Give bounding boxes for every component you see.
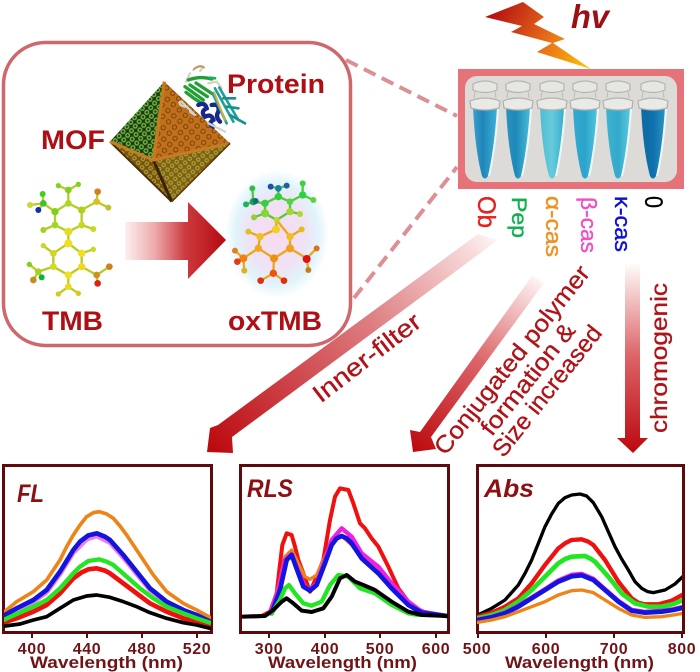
- Abs tick labels: [463, 641, 696, 658]
- Abs title: Abs: [483, 475, 534, 503]
- Abs tick labels: 500: [463, 641, 491, 658]
- Abs axis ticks: [478, 633, 682, 638]
- vial: beta-cas: [570, 81, 600, 178]
- label: formation &: formation &: [475, 318, 581, 441]
- Abs curves: [478, 494, 683, 622]
- vial label: kappa-cas: κ-cas: [610, 196, 635, 252]
- Abs tick labels: 600: [532, 641, 560, 658]
- icon: protein ribbon: [180, 66, 245, 132]
- dashed connector: lower: [354, 167, 457, 298]
- vial: alpha-cas: [537, 81, 567, 178]
- label: Size increased: Size increased: [487, 320, 608, 462]
- vial label: beta-cas: β-cas: [576, 197, 601, 253]
- FL curves: [3, 512, 210, 628]
- vial: kappa-cas: [603, 81, 633, 178]
- RLS tick labels: 300: [255, 641, 283, 658]
- FL tick labels: 400: [18, 641, 46, 658]
- FL tick labels: [18, 641, 211, 658]
- vial label: Pep: Pep: [507, 197, 530, 238]
- RLS curves: [243, 488, 447, 617]
- vial: Pep: [503, 81, 533, 178]
- Abs tick labels: 800: [668, 641, 696, 658]
- label: Protein: Protein: [227, 69, 325, 99]
- molecule: TMB: [27, 182, 113, 297]
- arrow: conjugated polymer: [410, 276, 544, 452]
- FL tick labels: 480: [128, 641, 156, 658]
- Abs tick labels: 700: [600, 641, 628, 658]
- label: chromogenic: chromogenic: [646, 283, 672, 433]
- panel: vial photo: [458, 69, 684, 189]
- FL tick labels: 520: [183, 641, 211, 658]
- vial: control 0: [638, 81, 668, 178]
- RLS x-axis title: Wavelength (nm): [268, 653, 417, 672]
- panel: MOF catalysis: [4, 42, 350, 346]
- chart: Abs: [463, 466, 696, 672]
- label: Inner-filter: Inner-filter: [307, 308, 427, 408]
- FL tick labels: 440: [73, 641, 101, 658]
- FL x-axis title: Wavelength (nm): [30, 653, 183, 672]
- RLS tick labels: 400: [311, 641, 339, 658]
- arrow: chromogenic: [617, 264, 648, 453]
- label: TMB: TMB: [42, 306, 103, 336]
- Abs x-axis title: Wavelength (nm): [505, 653, 654, 672]
- RLS axis ticks: [269, 633, 436, 638]
- arrow: inner-filter: [207, 234, 498, 453]
- label: oxTMB: oxTMB: [228, 306, 322, 336]
- FL title: FL: [17, 480, 44, 508]
- label: MOF: MOF: [41, 125, 105, 155]
- RLS tick labels: 600: [422, 641, 450, 658]
- FL axis ticks: [32, 633, 197, 638]
- vial label: alpha-cas: α-cas: [541, 196, 566, 257]
- label: Conjugated polymer: Conjugated polymer: [429, 260, 596, 460]
- molecule: oxTMB: [232, 180, 320, 284]
- icon: MOF octahedron: [110, 82, 230, 202]
- RLS tick labels: 500: [366, 641, 394, 658]
- arrow: TMB to oxTMB: [125, 202, 226, 279]
- RLS title: RLS: [247, 475, 293, 503]
- glow behind oxTMB: [225, 170, 329, 298]
- dashed connector: upper: [346, 60, 457, 116]
- icon: lightning bolt: [485, 2, 591, 69]
- vial label: Ob: Ob: [472, 196, 500, 228]
- chart: FL: [3, 466, 212, 672]
- chart: RLS: [240, 466, 450, 672]
- vial: Ob: [470, 81, 500, 178]
- vial label: 0: 0: [639, 196, 667, 208]
- RLS tick labels: [255, 641, 450, 658]
